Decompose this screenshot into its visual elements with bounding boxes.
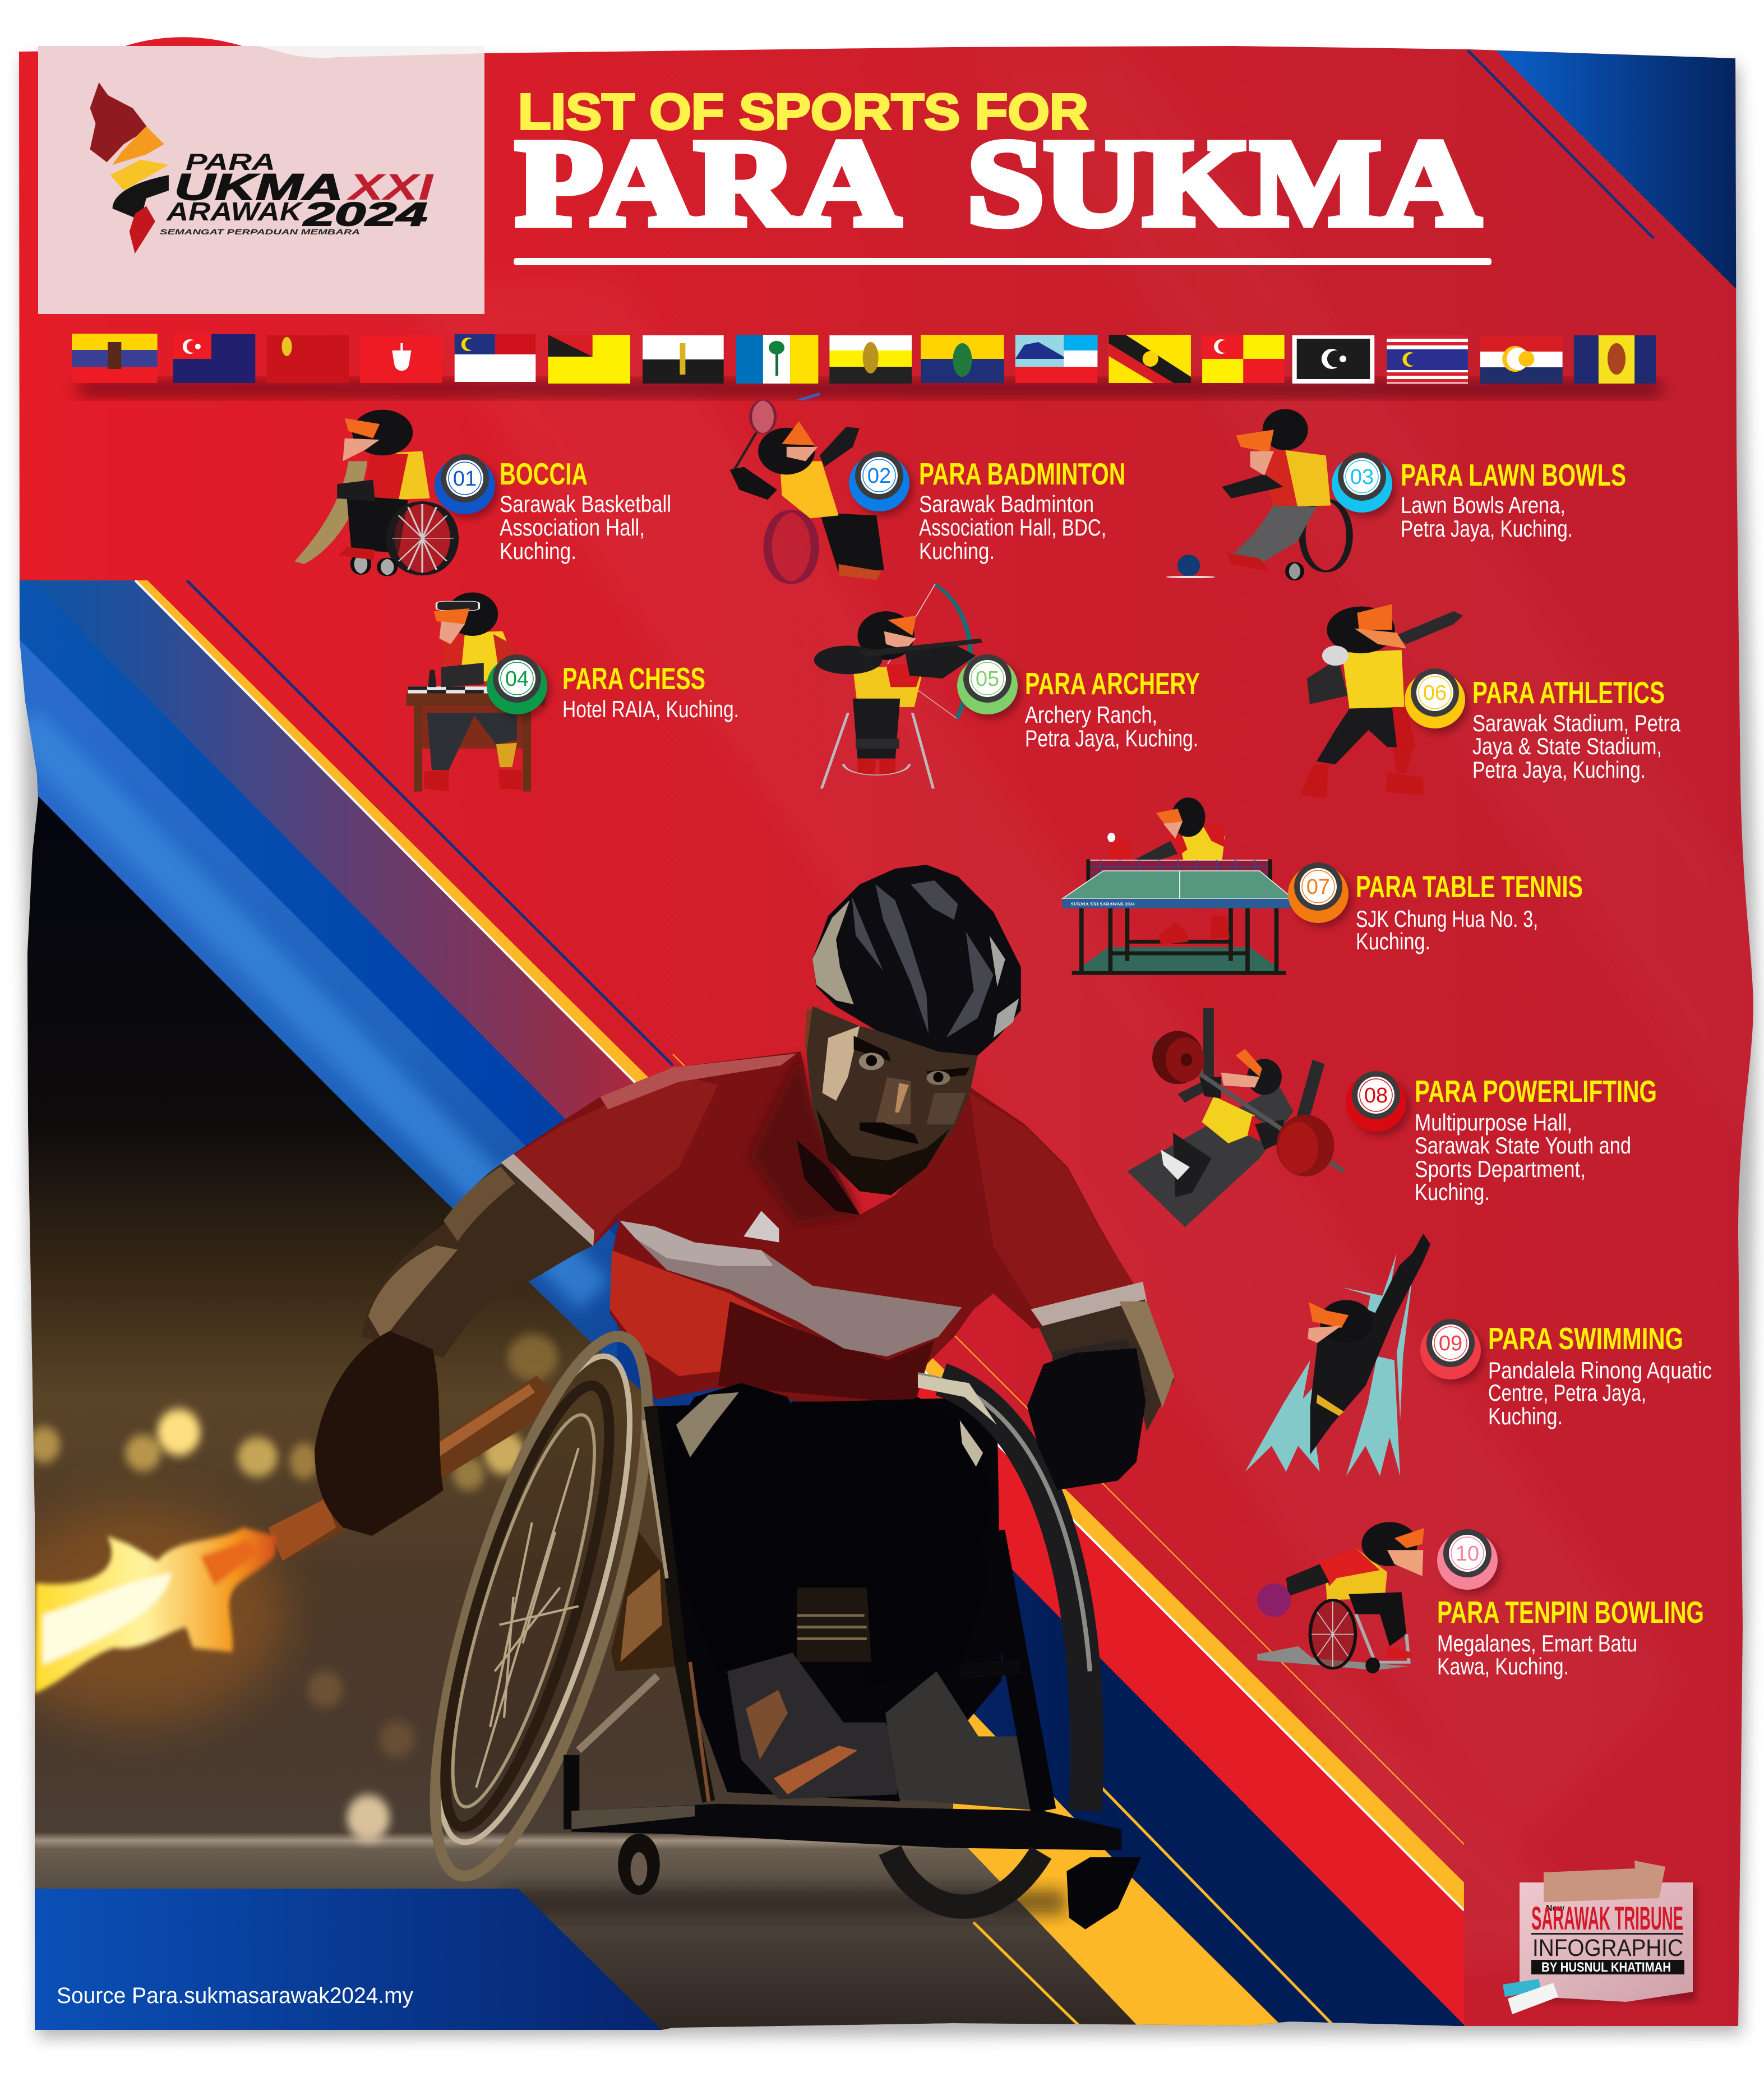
- venue: boccia: Association Hall,: [500, 514, 645, 541]
- right wheel: [941, 1379, 1087, 1811]
- badge 05: 05: [976, 667, 999, 691]
- title kicker: LIST OF SPORTS FOR: [518, 84, 1088, 140]
- venue: para archery: Petra Jaya, Kuching.: [1025, 725, 1198, 751]
- venue: para chess: Hotel RAIA, Kuching.: [562, 696, 739, 722]
- badge 09: [1420, 1319, 1485, 1384]
- item 02: para badminton: [730, 393, 1125, 583]
- beard: [816, 1109, 950, 1195]
- flag 9: [829, 335, 912, 384]
- heading: para table tennis: PARA TABLE TENNIS: [1356, 869, 1583, 904]
- title underline: [514, 258, 1491, 265]
- athlete: legs, shoes and wheelchair: [392, 1317, 1146, 1930]
- mascot: athletics: [1300, 604, 1463, 799]
- diagonal stripes: [11, 561, 1469, 2030]
- badge 02: [849, 451, 913, 516]
- venue: para lawn bowls: Petra Jaya, Kuching.: [1401, 515, 1573, 542]
- flag 15: [1387, 335, 1468, 384]
- item 04: para chess: [406, 592, 739, 791]
- athlete: right forearm: [1038, 1299, 1174, 1431]
- badge 10: [1437, 1529, 1502, 1594]
- venue: para swimming: Centre, Petra Jaya,: [1488, 1379, 1646, 1406]
- mascot: table tennis: [1062, 797, 1294, 974]
- heading: para chess: PARA CHESS: [562, 661, 705, 696]
- logo: wordmark: UKMA: [174, 166, 343, 207]
- venue: para tenpin bowling: [1437, 1630, 1637, 1679]
- venue: para tenpin bowling: Kawa, Kuching.: [1437, 1653, 1569, 1679]
- logo: wordmark: [160, 149, 434, 236]
- flag 3: [266, 335, 349, 383]
- pants: [664, 1383, 806, 1671]
- masthead: New: [1546, 1904, 1564, 1913]
- logo: wordmark: XXI: [345, 166, 434, 207]
- heading: para athletics: PARA ATHLETICS: [1472, 675, 1665, 710]
- venue: para badminton: Sarawak Badminton: [919, 491, 1094, 517]
- badge 01: [435, 454, 499, 519]
- item 01: boccia: [294, 410, 671, 575]
- byline: BY HUSNUL KHATIMAH: [1541, 1960, 1671, 1975]
- corner stripe: top right: [1468, 50, 1738, 291]
- venue: para athletics: Sarawak Stadium, Petra: [1472, 710, 1681, 736]
- photo: wheelchair athlete: [34, 865, 1174, 1930]
- venue: para lawn bowls: [1401, 492, 1573, 542]
- athlete: head and helmet: [797, 865, 1021, 1215]
- venue: para powerlifting: Kuching.: [1415, 1179, 1490, 1205]
- logo: flame mark: [90, 82, 169, 253]
- item 09: para swimming: [1245, 1234, 1712, 1476]
- badge 06: 06: [1423, 681, 1447, 705]
- badge 10: 10: [1456, 1542, 1479, 1566]
- badge 07: 07: [1306, 875, 1330, 899]
- badge 07: [1288, 862, 1352, 927]
- logo: wordmark: ARAWAK: [166, 197, 303, 226]
- badge 08: [1346, 1071, 1410, 1136]
- venue: para athletics: Petra Jaya, Kuching.: [1472, 756, 1646, 783]
- venue: para powerlifting: Multipurpose Hall,: [1415, 1109, 1572, 1136]
- venue: para table tennis: SJK Chung Hua No. 3,: [1356, 906, 1538, 932]
- mascot: swimming: [1245, 1234, 1430, 1476]
- flag 12: [1109, 335, 1191, 383]
- badge 05: [957, 654, 1022, 719]
- athlete: left arm, glove and torch: [34, 1162, 594, 1693]
- venue: boccia: Sarawak Basketball: [500, 491, 671, 517]
- flag 8: [736, 335, 818, 384]
- athlete: red shirt: [501, 1051, 1147, 1407]
- mascot: archery: [814, 584, 982, 788]
- badge 08: 08: [1364, 1084, 1388, 1107]
- mascot: chess: [406, 592, 545, 791]
- venue: para lawn bowls: Lawn Bowls Arena,: [1401, 492, 1566, 518]
- flag 14: [1292, 335, 1374, 384]
- venue: para table tennis: [1356, 906, 1538, 954]
- tape pieces: [1503, 1979, 1558, 2014]
- flag 5: [455, 334, 535, 382]
- flag 2: [173, 334, 255, 383]
- title: PARA: [516, 114, 900, 251]
- tape: [1544, 1861, 1665, 1902]
- venue: para archery: [1025, 702, 1198, 751]
- left glove: [315, 1331, 444, 1536]
- badge 06: [1405, 668, 1469, 733]
- venue: para athletics: [1472, 710, 1681, 783]
- badge 03: 03: [1350, 465, 1374, 489]
- heading: para powerlifting: PARA POWERLIFTING: [1415, 1074, 1657, 1109]
- title: SUKMA: [967, 114, 1480, 251]
- venue: para swimming: Pandalela Rinong Aquatic: [1488, 1357, 1712, 1383]
- shoes: [727, 1653, 902, 1799]
- venue: para archery: Archery Ranch,: [1025, 702, 1157, 728]
- logo: wordmark: 2024: [303, 196, 427, 233]
- torch handle: [268, 1376, 564, 1561]
- logo panel: [38, 46, 484, 314]
- mascot: table tennis: SUKMA XXI SARAWAK 2024: [1071, 902, 1135, 906]
- torch flame: [34, 1527, 275, 1693]
- venue: para badminton: [919, 491, 1106, 564]
- mascot: boccia: [294, 410, 454, 575]
- item 07: para table tennis: [1062, 797, 1583, 974]
- flag 7: [643, 335, 724, 384]
- logo: wordmark: SEMANGAT PERPADUAN MEMBARA: [160, 228, 360, 236]
- badge 03: [1332, 453, 1396, 518]
- heading: para swimming: PARA SWIMMING: [1488, 1321, 1683, 1356]
- mascot: lawn bowls: [1222, 409, 1350, 580]
- flag 11: [1015, 335, 1097, 383]
- flag 13: [1202, 335, 1285, 383]
- heading: para badminton: PARA BADMINTON: [919, 456, 1125, 491]
- badge 01: 01: [453, 467, 477, 491]
- footplate: [571, 1804, 1121, 1850]
- sleeve cuffs: [501, 1154, 594, 1247]
- shirt logo: [744, 1211, 779, 1243]
- venue: para badminton: Association Hall, BDC,: [919, 514, 1106, 541]
- flag 1: [72, 334, 158, 383]
- casters: [618, 1834, 660, 1895]
- heading: boccia: BOCCIA: [500, 456, 588, 491]
- mascot: powerlifting: [1127, 1008, 1344, 1227]
- badge 09: 09: [1439, 1332, 1462, 1355]
- heading: para lawn bowls: PARA LAWN BOWLS: [1401, 458, 1626, 492]
- footrest box: [797, 1587, 871, 1662]
- item 03: para lawn bowls: [1166, 409, 1626, 580]
- badge 04: [487, 654, 551, 719]
- mascot: badminton: [730, 393, 884, 583]
- flag 6: [548, 335, 630, 384]
- heading: para archery: PARA ARCHERY: [1025, 666, 1200, 701]
- venue: para powerlifting: [1415, 1109, 1631, 1205]
- flags row: [72, 334, 1660, 395]
- badge 02: 02: [867, 464, 891, 488]
- frame: [611, 1532, 676, 1671]
- item 05: para archery: [814, 584, 1200, 788]
- left wheel: [392, 1317, 690, 1895]
- flag 16: [1480, 336, 1563, 384]
- flag 10: [921, 335, 1004, 383]
- flag 4: [360, 335, 442, 383]
- right glove: [1027, 1348, 1146, 1490]
- eyes and brows: [854, 1036, 970, 1079]
- item 08: para powerlifting: [1127, 1008, 1657, 1227]
- lawn bowl: [1166, 555, 1215, 578]
- logo: wordmark: PARA: [186, 149, 275, 175]
- mascot: tenpin bowling: [1257, 1522, 1424, 1673]
- item 10: para tenpin bowling: [1257, 1522, 1704, 1679]
- item 06: para athletics: [1300, 604, 1681, 799]
- venue: boccia: Kuching.: [500, 538, 576, 564]
- source band: [28, 1889, 662, 2030]
- neck collar: [797, 1140, 860, 1215]
- venue: para athletics: Jaya & State Stadium,: [1472, 733, 1662, 759]
- venue: para swimming: [1488, 1357, 1712, 1429]
- venue: para table tennis: Kuching.: [1356, 928, 1430, 954]
- badge 04: 04: [505, 667, 529, 691]
- venue: para tenpin bowling: Megalanes, Emart Batu: [1437, 1630, 1637, 1656]
- helmet: [812, 865, 1021, 1055]
- venue: para badminton: Kuching.: [919, 538, 995, 564]
- title: [516, 114, 1480, 251]
- chair interior shade: [653, 1397, 1001, 1802]
- credit card: Sarawak Tribune: [1503, 1861, 1696, 2014]
- source text: Source Para.sukmasarawak2024.my: [57, 1983, 413, 2008]
- flag 17: [1574, 335, 1656, 384]
- venue: para powerlifting: Sarawak State Youth and: [1415, 1132, 1631, 1159]
- infographic label: INFOGRAPHIC: [1532, 1935, 1683, 1962]
- masthead: [1531, 1900, 1683, 1937]
- venue: para swimming: Kuching.: [1488, 1403, 1563, 1429]
- venue: para powerlifting: Sports Department,: [1415, 1156, 1586, 1182]
- background photo: night track: [0, 769, 1283, 2041]
- venue: boccia: [500, 491, 671, 564]
